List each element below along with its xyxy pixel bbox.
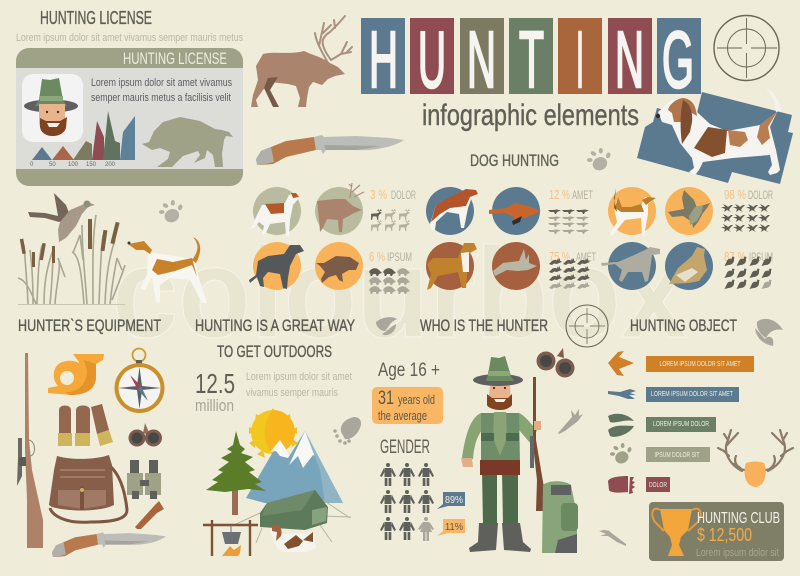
icon: antlers on shield xyxy=(718,430,793,487)
pictogram: hare grid xyxy=(549,258,590,289)
callout: average age 31: the average xyxy=(378,408,427,423)
pictogram: gender people xyxy=(380,463,434,541)
license text xyxy=(91,77,232,104)
club amount: $ 12,500 xyxy=(697,525,752,545)
title letter blocks: HUNTING: N xyxy=(467,15,496,104)
stat: 87 percent ipsum xyxy=(724,249,773,264)
text: outdoors description xyxy=(246,371,352,399)
illustration: small dog by tent xyxy=(270,525,316,552)
illustration: sun xyxy=(249,408,298,458)
item: olive track xyxy=(610,443,710,466)
icon: game call whistle xyxy=(135,501,164,529)
stat: 6 percent ipsum: IPSUM xyxy=(387,250,412,264)
item: red track: DOLOR xyxy=(649,480,667,489)
illustration: fir tree xyxy=(206,431,266,515)
icon: paw print top xyxy=(587,148,611,173)
vest xyxy=(481,413,520,462)
stat: 12 percent amet: AMET xyxy=(572,188,593,202)
illustration: mountains xyxy=(246,431,343,503)
circle row 2: hare xyxy=(492,242,540,290)
icon: leather hunting bag xyxy=(49,455,127,522)
stat: 3 percent dolor xyxy=(370,187,416,202)
icon: hoof print right xyxy=(755,319,783,346)
arms xyxy=(462,413,537,459)
panel: hunting license card xyxy=(16,48,243,186)
rifle xyxy=(530,377,547,511)
icon: rifle xyxy=(17,353,43,548)
item: blue track: LOREM IPSUM DOLOR SIT AMET xyxy=(651,389,733,398)
illustration: tent xyxy=(234,490,351,543)
icon: crosshair top right xyxy=(714,16,779,80)
heading: outdoors xyxy=(195,316,355,361)
heading: dog hunting: DOG HUNTING xyxy=(470,151,559,170)
basset hound on blue shape xyxy=(637,88,793,184)
hat xyxy=(473,356,523,386)
title letter blocks: HUNTING: T xyxy=(519,15,544,104)
icon: equipment knife xyxy=(52,532,166,557)
ammo belt xyxy=(480,460,520,475)
boar silhouette xyxy=(142,117,233,167)
illustration: campfire and pot xyxy=(203,520,258,556)
title letter blocks: HUNTING: I xyxy=(576,15,584,104)
stat: 6 percent ipsum xyxy=(369,249,412,264)
item: green track: LOREM IPSUM DOLOR xyxy=(653,419,709,428)
stat: 12 percent amet: 12 % xyxy=(549,187,570,202)
illustration: hunter xyxy=(461,356,578,553)
pictogram: deer grid xyxy=(371,209,410,231)
callout: average age 31: 31 xyxy=(378,388,394,409)
area chart: 200 xyxy=(105,162,116,168)
heading: hunter's equipment: HUNTER`S EQUIPMENT xyxy=(18,316,161,335)
heading: hunting license: HUNTING LICENSE xyxy=(40,8,152,28)
area chart: 150 xyxy=(86,162,97,168)
icon: pointing dog xyxy=(128,237,207,303)
stat: 75 percent amet: AMET xyxy=(576,250,596,264)
icon: reindeer xyxy=(251,16,352,107)
circle row 1: greyhound xyxy=(247,187,301,236)
illustration: reeds xyxy=(18,215,125,305)
icon: trophy xyxy=(652,509,701,556)
area chart: 0 xyxy=(30,162,34,168)
legs and boots xyxy=(469,470,531,552)
license text: Lorem ipsum dolor sit amet vivamus xyxy=(91,77,232,89)
icon: hunting horn xyxy=(48,354,104,395)
heading: outdoors: TO GET OUTDOORS xyxy=(217,342,332,361)
portrait of hunter xyxy=(22,74,83,142)
item: green track xyxy=(608,414,716,437)
stat: 12.5 million: 12.5 xyxy=(195,368,235,399)
circle row 2: brown dog xyxy=(426,242,477,290)
heading: who is the hunter: WHO IS THE HUNTER xyxy=(420,316,548,335)
stat: 87 percent ipsum: 87 % xyxy=(724,249,746,264)
stat: 6 percent ipsum: 6 % xyxy=(369,249,385,264)
stat: 12.5 million xyxy=(195,368,235,415)
stat: 75 percent amet: 75 % xyxy=(549,249,570,264)
subtitle: infographic elements: infographic elements xyxy=(422,99,639,132)
heading: hunting object: HUNTING OBJECT xyxy=(630,316,737,335)
icon: bird track upper xyxy=(558,409,583,434)
circle row 1: beagle on orange xyxy=(608,187,656,236)
icon: bear paw print xyxy=(333,417,361,445)
item: red track xyxy=(608,476,670,494)
item: blue track xyxy=(608,387,739,402)
stat: 98 percent dolor: 98 % xyxy=(724,187,746,202)
callout: average age 31 xyxy=(372,387,443,424)
text: age 16+: Age 16 + xyxy=(378,360,440,381)
circle row 2: black dog on orange xyxy=(249,242,304,290)
stat: 3 percent dolor: 3 % xyxy=(370,187,387,202)
icon: goggles binoculars xyxy=(536,348,574,378)
callout: 11 percent: 11% xyxy=(445,521,463,533)
club text: Lorem ipsum dolor sit xyxy=(696,547,779,559)
title letter blocks: HUNTING: N xyxy=(615,15,644,104)
pictogram: duck grid xyxy=(721,204,770,232)
title letter blocks: HUNTING: H xyxy=(369,15,398,104)
title letter blocks: HUNTING xyxy=(361,15,701,104)
text: outdoors description: vivamus semper mauris xyxy=(246,387,338,399)
item: orange track xyxy=(608,351,754,376)
icon: flying duck xyxy=(28,193,95,242)
icon: shotgun shells xyxy=(58,404,113,446)
stat: 75 percent amet xyxy=(549,249,596,264)
icon: paw print left xyxy=(159,200,183,225)
circle row 1: reindeer xyxy=(315,183,364,235)
area chart xyxy=(30,111,135,168)
icon: crosshair middle xyxy=(566,305,608,347)
icon: hunting knife xyxy=(256,135,404,165)
callout: 89 percent xyxy=(437,492,465,509)
item: orange track: LOREM IPSUM DOLOR SIT AMET xyxy=(660,359,741,368)
watermark: colourbox xyxy=(112,222,687,365)
card title: HUNTING LICENSE xyxy=(123,49,227,68)
stat: 87 percent ipsum: IPSUM xyxy=(749,250,773,264)
hand xyxy=(534,421,541,430)
circle row 2: quail on blue xyxy=(665,242,713,290)
stat: 98 percent dolor xyxy=(724,187,773,202)
area chart: 50 xyxy=(49,162,56,168)
callout: 89 percent: 89% xyxy=(445,494,463,506)
callout: 11 percent xyxy=(437,519,465,536)
stat: 98 percent dolor: DOLOR xyxy=(748,188,773,202)
stat: 12 percent amet xyxy=(549,187,593,202)
circle row 1: fox on blue xyxy=(489,187,541,235)
stat: 3 percent dolor: DOLOR xyxy=(391,188,416,202)
title letter blocks: HUNTING: U xyxy=(418,15,446,104)
item: olive track: IPSUM DOLOR SIT xyxy=(654,450,700,459)
text: outdoors description: Lorem ipsum dolor sit amet xyxy=(246,371,352,383)
icon: bird track lower xyxy=(599,530,626,546)
circle row 2: setter on blue xyxy=(601,242,660,290)
pictogram: fox grid xyxy=(548,210,589,234)
area chart: 100 xyxy=(68,162,79,168)
heading: outdoors: HUNTING IS A GREAT WAY xyxy=(195,316,355,335)
circle row 1: duck on orange xyxy=(665,187,713,235)
panel: hunting club xyxy=(649,502,784,561)
pictogram: boar grid xyxy=(369,268,410,294)
heading: gender: GENDER xyxy=(380,437,430,458)
stat: 12.5 million: million xyxy=(195,396,234,415)
head xyxy=(488,385,511,410)
title letter blocks: HUNTING: G xyxy=(662,15,694,104)
callout: average age 31: years old xyxy=(398,392,435,407)
text: license subtitle: Lorem ipsum dolor sit amet vivamus semper mauris metus xyxy=(16,32,243,44)
icon: small binoculars xyxy=(128,423,162,446)
list: hunting objects xyxy=(608,351,754,494)
circle row 1: brown dog on blue xyxy=(426,187,479,235)
icon: compass xyxy=(114,348,164,413)
pictogram: quail grid xyxy=(724,256,772,289)
icon: hoof print mid xyxy=(376,317,397,335)
icon: large binoculars xyxy=(127,460,161,499)
circle row 2: boar on orange xyxy=(315,242,363,290)
backpack xyxy=(542,481,578,553)
license text: semper mauris metus a facilisis velit xyxy=(91,92,231,104)
